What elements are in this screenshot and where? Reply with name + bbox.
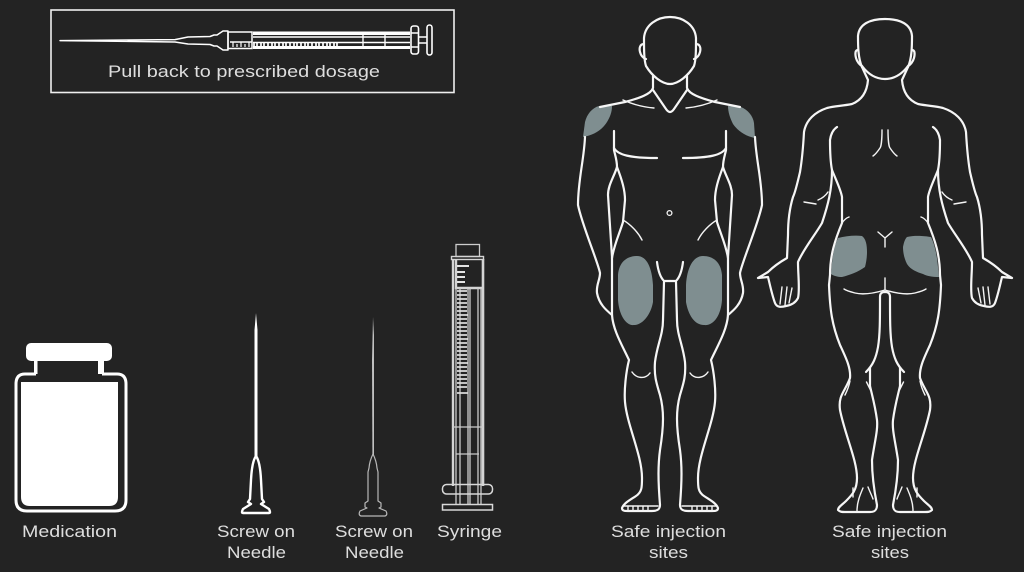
label: safe injection sites, back: Safe injection: [832, 523, 947, 541]
injection site: left glute: [831, 236, 867, 277]
icon: screw on needle, grey: [359, 317, 387, 516]
body outline: [758, 50, 1012, 512]
label: screw on needle 2: Needle: [345, 544, 404, 562]
injection site: right thigh: [686, 256, 722, 325]
injection site: right glute: [903, 236, 939, 277]
head outline: [858, 19, 912, 79]
label: screw on needle 2: [335, 523, 413, 562]
head outline: [644, 17, 696, 84]
label: syringe: Syringe: [437, 523, 502, 541]
label: safe injection sites, back: sites: [871, 544, 909, 562]
figure: body front with injection sites: [578, 17, 762, 511]
label: screw on needle 1: Screw on: [217, 523, 295, 541]
icon: horizontal syringe: [60, 25, 432, 55]
body outline: [578, 44, 762, 511]
icon: screw on needle, bright: [242, 313, 270, 513]
label: safe injection sites, back: [832, 523, 947, 562]
label: medication: Medication: [22, 523, 117, 541]
panel: pull back to prescribed dosage: [51, 10, 454, 92]
injection site: left thigh: [618, 256, 653, 325]
injection site: left shoulder: [583, 106, 612, 137]
icon: vertical syringe: [442, 244, 492, 510]
injection site: right shoulder: [728, 106, 755, 138]
label: screw on needle 1: [217, 523, 295, 562]
icon: medication vial: [16, 343, 126, 511]
label: screw on needle 2: Screw on: [335, 523, 413, 541]
label: safe injection sites, front: sites: [649, 544, 688, 562]
label: safe injection sites, front: [611, 523, 726, 562]
figure: body back with injection sites: [758, 19, 1012, 512]
label: screw on needle 1: Needle: [227, 544, 286, 562]
label: safe injection sites, front: Safe injection: [611, 523, 726, 541]
label: pull back: Pull back to prescribed dosage: [108, 63, 380, 81]
